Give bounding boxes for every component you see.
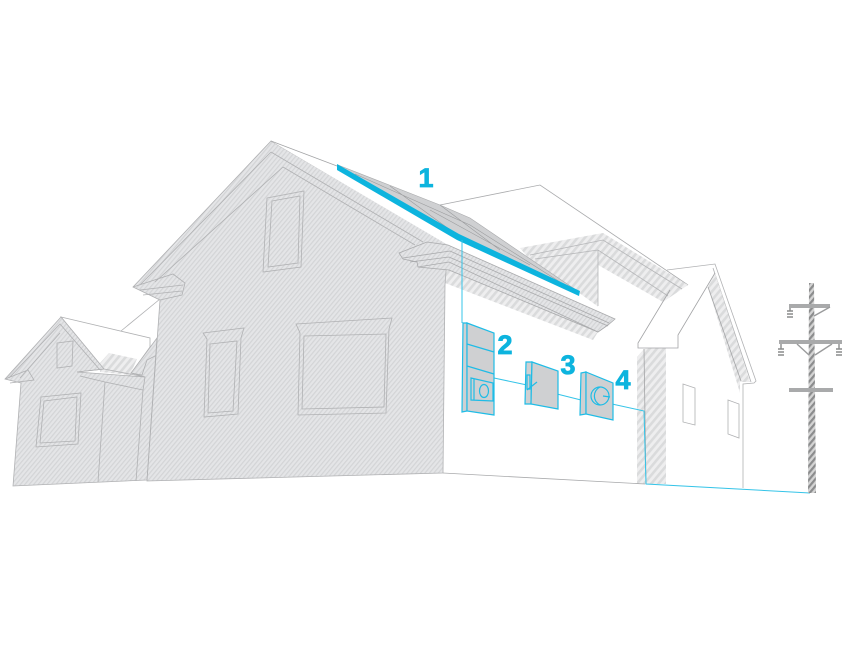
middle window (203, 328, 244, 417)
panel edge highlight (337, 164, 580, 296)
main eave cornice (399, 242, 615, 332)
label 1: 1 (418, 163, 434, 193)
hatched side wall (637, 346, 666, 484)
callout 3: disconnect switch (525, 350, 576, 409)
wiring (462, 240, 810, 493)
right gable house (637, 264, 756, 488)
callout 2: battery unit (462, 323, 513, 415)
back house roof and shadow (440, 185, 715, 484)
large window (296, 318, 392, 415)
ground line (443, 473, 645, 484)
small left house (5, 299, 160, 486)
utility pole (778, 283, 842, 493)
label 3: 3 (560, 350, 576, 380)
callout 4: meter (580, 365, 631, 420)
gable roof (638, 264, 756, 384)
windows (683, 384, 739, 438)
front gable roof edge (638, 273, 715, 484)
callout 1: solar panels on roof (337, 163, 580, 296)
upper window (263, 191, 304, 272)
label 2: 2 (497, 330, 513, 360)
cornice shadow (445, 268, 598, 340)
panels (338, 165, 579, 292)
label 4: 4 (615, 365, 631, 395)
main house gable wall (133, 141, 448, 481)
white gap between roof edge and solar panels (271, 141, 615, 319)
hatched gable soffit (708, 273, 750, 393)
